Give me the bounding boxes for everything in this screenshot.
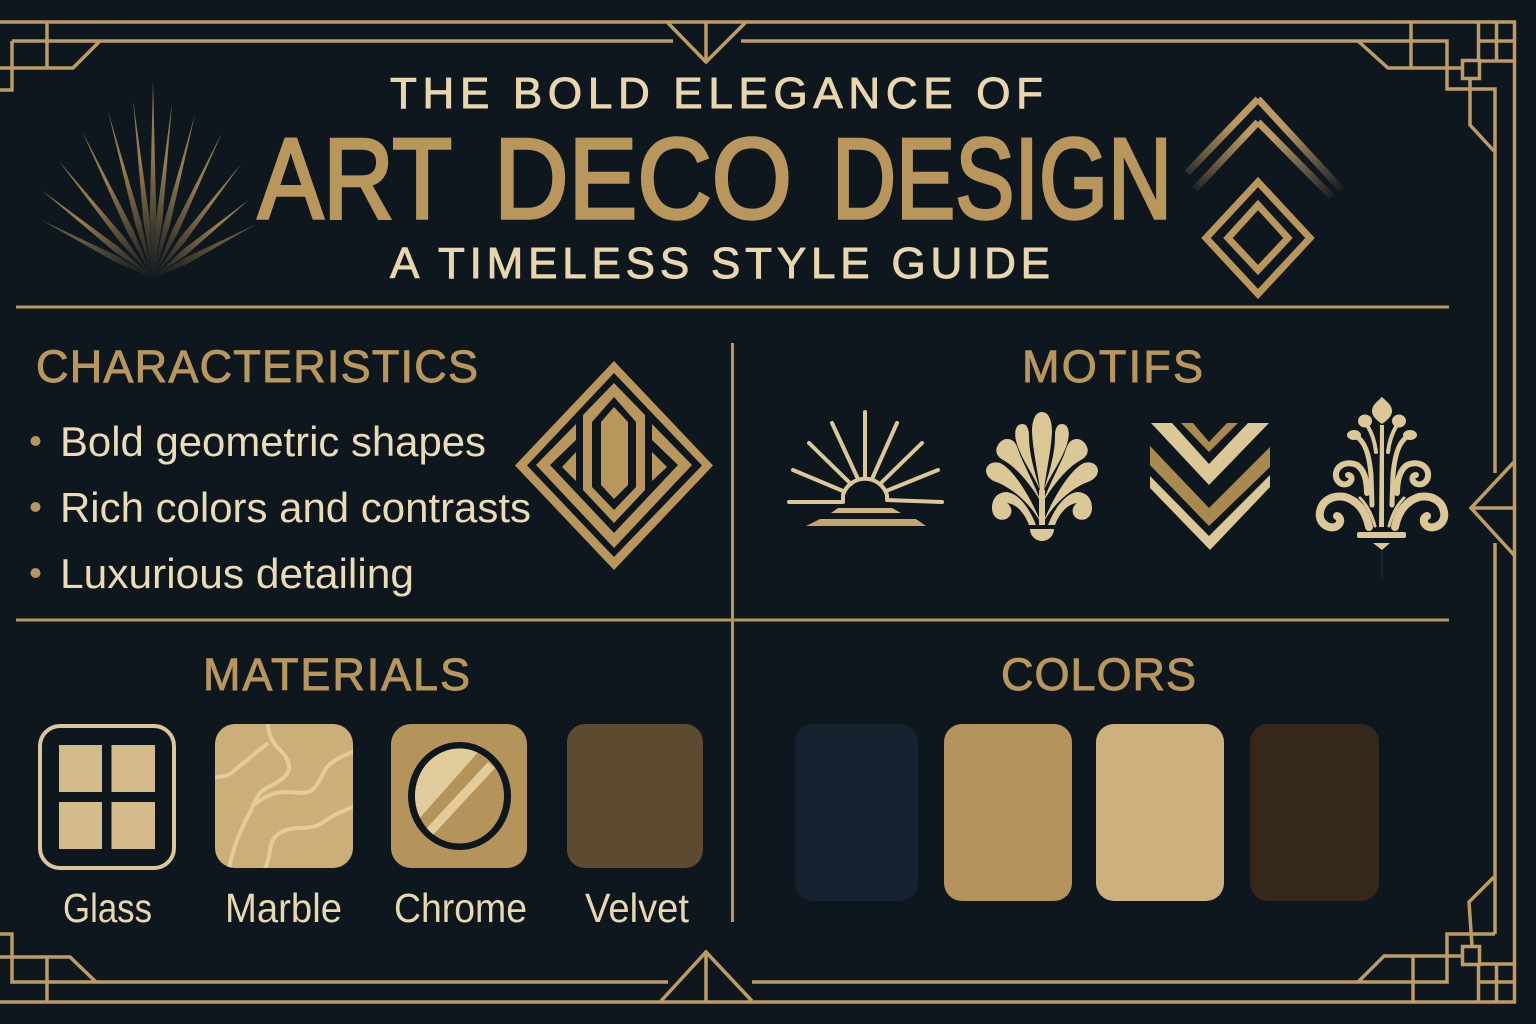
bullet list (30, 418, 531, 597)
right edge triangle (1471, 462, 1514, 934)
bottom centre triangle (661, 952, 752, 1001)
top left corner ornament (0, 22, 673, 90)
swatch: tan (1096, 724, 1224, 901)
bullet list: Rich colors and contrasts (60, 484, 531, 531)
heading: characteristics: CHARACTERISTICS (36, 341, 478, 392)
label: velvet: Velvet (585, 885, 690, 931)
main title (258, 116, 1172, 243)
label: glass: Glass (63, 885, 152, 931)
bottom right corner ornament (752, 877, 1514, 1002)
top right corner ornament (1358, 22, 1514, 151)
panel: motifs (789, 341, 1444, 578)
swatch: glass (40, 726, 174, 868)
motif: fleur ornament (1320, 397, 1444, 578)
decorative sunburst (39, 80, 256, 281)
panel: materials (40, 649, 703, 931)
main title: DESIGN (832, 116, 1172, 243)
swatch: navy (795, 724, 918, 901)
main title: DECO (494, 116, 792, 243)
title line 3: A TIMELESS STYLE GUIDE (390, 239, 1050, 288)
heading: motifs: MOTIFS (1022, 341, 1203, 392)
bullet list: Bold geometric shapes (60, 418, 486, 465)
section dividers (16, 307, 1449, 922)
icon: nested diamonds (1206, 182, 1310, 294)
motif: chevrons (1150, 423, 1270, 550)
title line 1: THE BOLD ELEGANCE OF (390, 69, 1043, 118)
swatch: chrome (391, 724, 527, 868)
label: marble: Marble (225, 885, 342, 931)
swatch: marble (214, 722, 355, 870)
icon: fading chevrons (1187, 99, 1342, 197)
label: chrome: Chrome (394, 885, 527, 931)
top inner rule right (741, 41, 1495, 473)
icon: art deco diamond emblem (515, 361, 713, 570)
heading: colors: COLORS (1001, 649, 1196, 700)
motif: sunrise (789, 412, 942, 526)
panel: characteristics (30, 341, 713, 597)
top centre triangle (668, 23, 745, 62)
panel: colors (795, 649, 1379, 901)
main title: ART (258, 116, 452, 243)
swatch: velvet (567, 724, 703, 868)
bullet list: Luxurious detailing (60, 550, 414, 597)
motif: shell palmette (986, 412, 1098, 541)
heading: materials: MATERIALS (203, 649, 470, 700)
swatch: gold (944, 724, 1072, 901)
swatch: dark brown (1250, 724, 1379, 901)
bottom left corner ornament (0, 934, 668, 1002)
